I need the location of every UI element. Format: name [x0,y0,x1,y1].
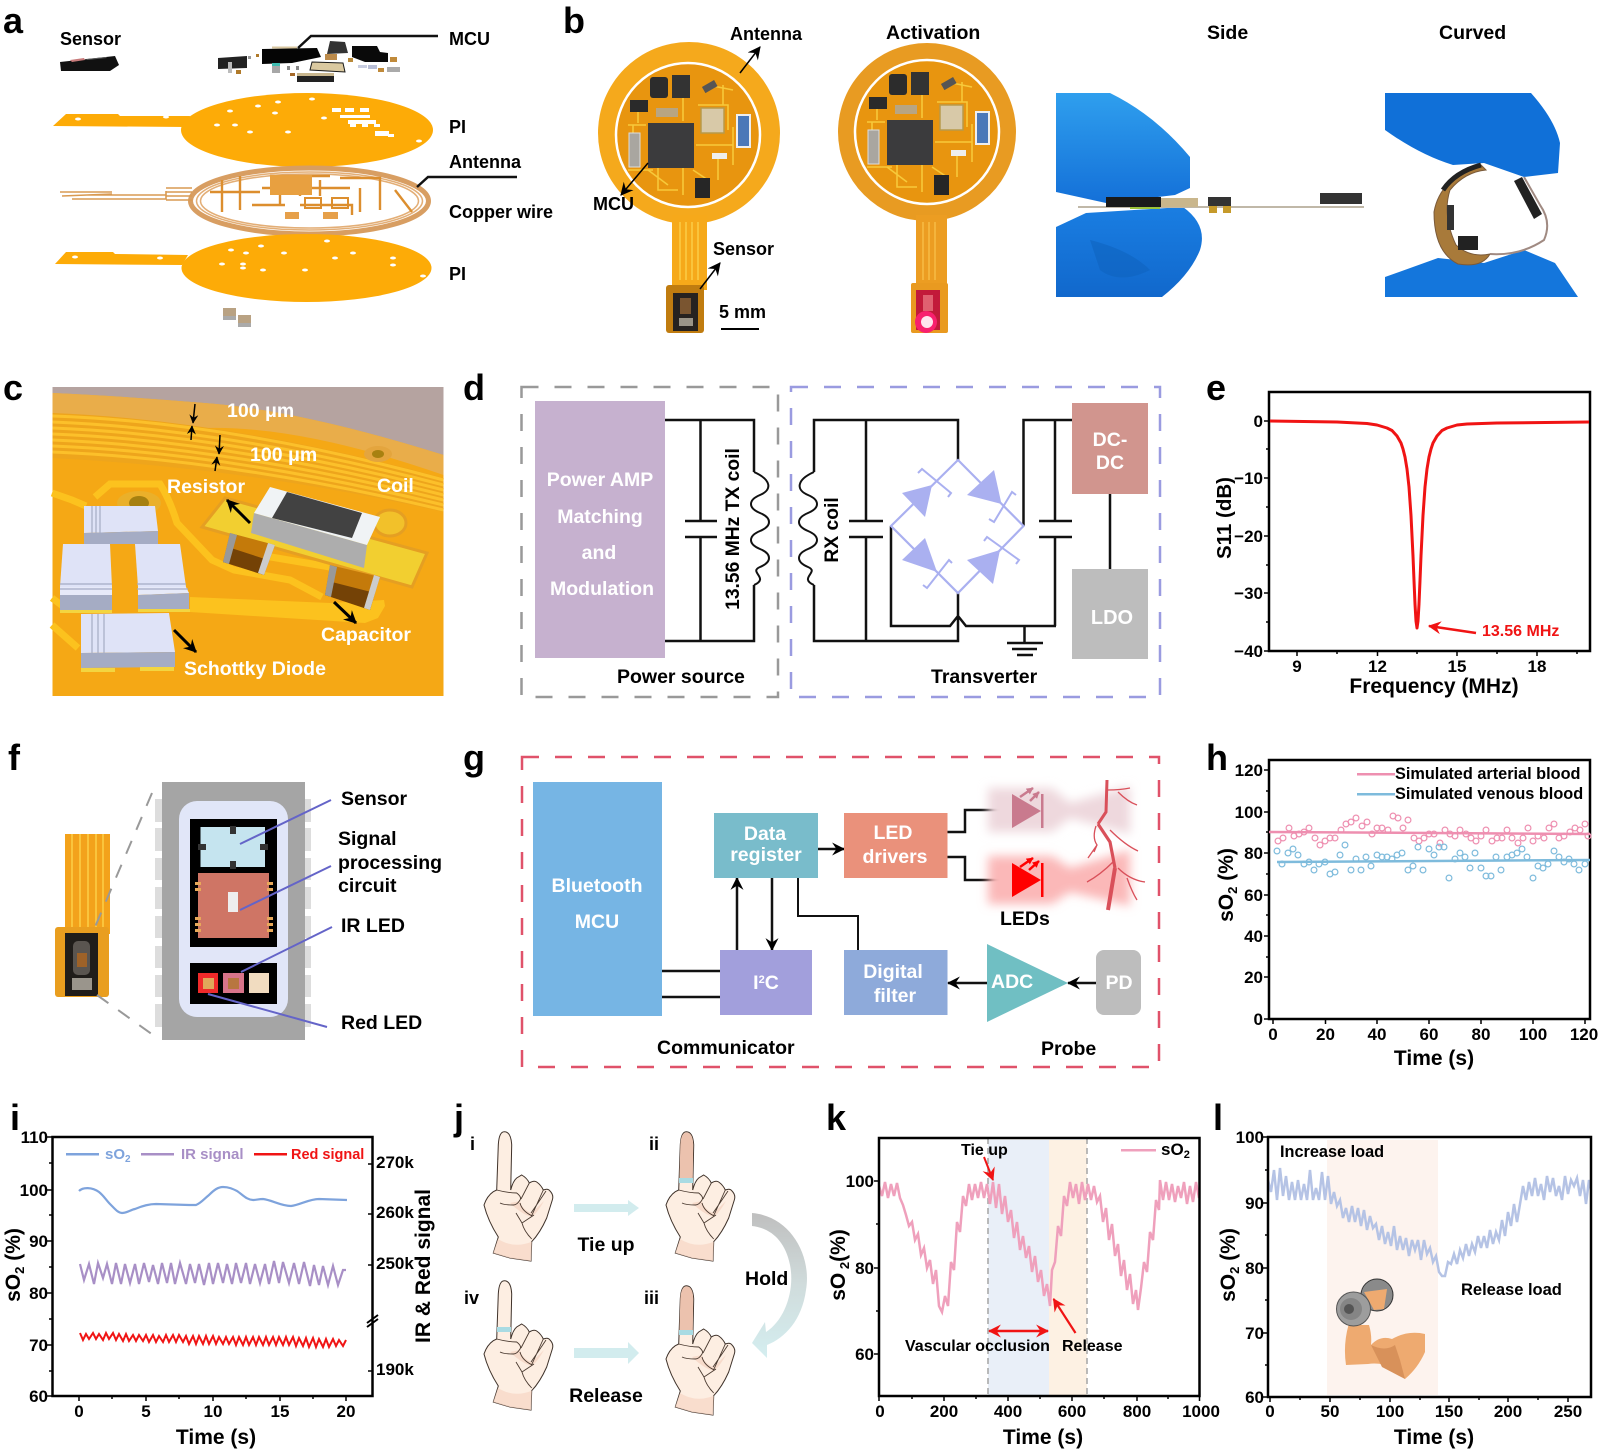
label: Resistor: Resistor [167,476,245,498]
panel a: exploded device layers [3,0,553,327]
IR signal line [80,1261,346,1286]
y tick labels: −10 [1234,469,1263,488]
step labels: iii [644,1288,659,1308]
diode bridge [891,460,1024,593]
panel letter j: j [453,1097,464,1138]
transverter dashed box [791,387,1160,697]
label: 100 μm: 100 μm [250,444,317,466]
x tick labels: 150 [1435,1402,1463,1421]
block: Digital filter: filter [874,985,917,1007]
label: PI: PI [449,264,466,284]
sensor package diagram [155,782,311,1040]
panel d: wireless power circuit [463,367,1160,697]
right y tick labels: 260k [376,1203,414,1222]
antenna and copper wire layer [60,168,428,234]
power AMP block: Matching [557,506,643,528]
hand i [484,1132,553,1261]
MCU leader line [298,36,438,48]
block: LED drivers: drivers [862,846,928,868]
LED glow [988,786,1130,906]
x tick labels: 600 [1058,1402,1086,1421]
panel letter d: d [463,367,485,408]
panel i: signal chart [2,1097,435,1449]
panel letter k: k [826,1097,847,1138]
label: Increase load: Increase load [1280,1143,1384,1161]
label: Antenna: Antenna [449,152,522,172]
panel h: sO2 scatter chart [1206,737,1598,1070]
block: Data register: register [730,844,802,866]
icon: blood vessel [1087,780,1145,910]
connecting wires [662,810,1096,997]
LDO block: LDO [1091,607,1133,629]
left y tick labels: 70 [29,1336,48,1355]
label: Transverter: Transverter [931,666,1038,688]
y tick labels: 100 [1235,803,1263,822]
dashed frame [522,757,1159,1067]
y tick labels: 60 [1244,886,1263,905]
right y tick labels: 250k [376,1254,414,1273]
photo: sensor flex [55,834,110,997]
left y tick labels: 90 [29,1232,48,1251]
power AMP block: Power AMP [547,469,653,491]
label: 13.56 MHz TX coil: 13.56 MHz TX coil [723,448,744,610]
panel letter e: e [1206,367,1226,408]
chart frame and ticks [47,1137,378,1401]
panel b: device photographs [563,0,1578,333]
legend: sO [1161,1140,1184,1159]
block: Digital filter: Digital [863,961,923,983]
x tick labels: 200 [930,1402,958,1421]
label: Release: Release [569,1385,643,1407]
label: Signal processing circuit: circuit [338,875,397,897]
x tick labels: 15 [271,1402,289,1421]
panel f: sensor package [8,737,442,1040]
left y tick labels: 80 [29,1284,48,1303]
chart frame and ticks [1263,1137,1591,1402]
bottom PI layer [55,234,432,302]
x tick labels: 80 [1472,1025,1490,1044]
panel k: occlusion sO2 chart [826,1097,1220,1449]
panel letter i: i [10,1097,20,1138]
chart frame and ticks [1264,392,1590,656]
legend: Simulated venous blood [1395,785,1583,803]
x tick labels [1265,1402,1582,1421]
y tick labels: 100 [1236,1128,1264,1147]
x tick labels: 10 [204,1402,222,1421]
x tick labels [1268,1025,1598,1044]
label: Communicator: Communicator [657,1037,795,1059]
y tick labels [1235,761,1263,1029]
label: Side: Side [1207,22,1248,44]
y tick labels: 100 [846,1172,874,1191]
block: I2C: I [753,972,759,994]
step labels [464,1134,659,1308]
arrows to components [174,500,356,652]
panel l: load sO2 chart [1213,1097,1591,1449]
y axis title: sO [827,1273,850,1301]
panel e: S11 chart [1206,367,1590,698]
y axis title: (%) [1215,848,1238,887]
RX circuit wires [799,420,1110,655]
legend: 2 [1184,1149,1190,1161]
label: Probe: Probe [1041,1038,1096,1060]
x tick labels: 100 [1376,1402,1404,1421]
annotation: 13.56 MHz [1429,623,1559,640]
arrow: antenna [740,47,760,73]
block: Bluetooth MCU: MCU [575,911,619,933]
sO2 line [79,1187,347,1213]
y tick labels: 0 [1254,412,1263,431]
panel letter f: f [8,737,21,778]
block: PD [1096,950,1141,1015]
label: Copper wire: Copper wire [449,202,553,222]
label: LEDs: LEDs [1000,908,1050,930]
panel letter c: c [3,367,23,408]
label: Schottky Diode: Schottky Diode [184,658,326,680]
label: Release: Release [1062,1338,1123,1355]
DC-DC block: DC [1096,452,1124,474]
label: Signal processing circuit: Signal [338,828,397,850]
panel letter h: h [1206,737,1228,778]
DC-DC block: DC- [1093,429,1127,451]
label: PI: PI [449,117,466,137]
label: Signal processing circuit: processing [338,852,442,874]
label: Sensor: Sensor [341,788,408,810]
x tick labels: 100 [1519,1025,1547,1044]
photo: side view [1056,93,1364,297]
y axis title: 2 [1225,887,1240,894]
panel c: circuit closeup render [3,367,444,696]
sO2 trace [879,1180,1199,1312]
power AMP block: and [582,542,616,564]
y axis title: 2 [837,1262,852,1273]
step labels: iv [464,1288,479,1308]
arrow: release [574,1342,639,1364]
y tick labels: 20 [1244,968,1263,987]
y tick labels: 60 [855,1345,874,1364]
power AMP block [535,401,665,658]
arrow: sensor [700,263,720,289]
label: Coil: Coil [377,475,414,497]
x tick labels: 1000 [1182,1402,1220,1421]
label: Tie up: Tie up [577,1234,635,1256]
x tick labels: 50 [1321,1402,1339,1421]
label: Signal processing circuit [338,828,442,897]
x tick labels: 0 [875,1402,885,1421]
x tick labels [875,1402,1220,1421]
block: ADC: ADC [991,971,1033,993]
block: Data register: Data [744,823,786,845]
release arrow [1054,1299,1076,1333]
x tick labels: 200 [1494,1402,1522,1421]
legend [1357,765,1583,803]
y tick labels [1236,1128,1264,1407]
label: IR LED: IR LED [341,915,405,937]
block: PD: PD [1105,972,1133,994]
occlusion span arrow [989,1330,1048,1332]
y tick labels: −30 [1234,584,1263,603]
resistor [251,487,380,568]
x axis title: Time (s) [176,1426,256,1449]
y tick labels: 80 [855,1259,874,1278]
label: Activation: Activation [886,22,980,44]
label: Antenna: Antenna [730,24,803,44]
hand iv [484,1281,553,1410]
capacitors [223,533,380,610]
x tick labels [74,1402,355,1421]
zoom guide lines [95,793,153,1035]
x tick labels: 15 [1448,657,1466,676]
x tick labels: 9 [1292,657,1302,676]
annotation: Tie up: Tie up [961,1142,1008,1159]
label: 100 μm: 100 μm [227,400,294,422]
label: Sensor: Sensor [713,239,774,259]
DC-DC block [1072,403,1148,494]
y tick labels: 70 [1245,1324,1264,1343]
arterial scatter [1278,816,1588,845]
power source dashed box [522,387,778,697]
chart frame and ticks [1264,760,1590,1024]
y tick labels: 40 [1244,927,1263,946]
legend: sO [105,1146,125,1163]
y tick labels: 0 [1254,1010,1263,1029]
panel j: finger occlusion steps [453,1097,807,1415]
venous reference line [1277,860,1590,862]
y tick labels: 120 [1235,761,1263,780]
label: MCU: MCU [593,194,634,214]
x tick labels: 5 [141,1402,151,1421]
left y tick labels: 110 [21,1128,48,1147]
x tick labels: 0 [1265,1402,1275,1421]
power AMP block: Modulation [550,578,654,600]
icon: sensor chip [60,56,119,71]
left y axis title: sO [2,1274,25,1302]
y axis title: S11 (dB) [1213,477,1236,559]
reference lines [1269,832,1590,834]
arrow: tie up [574,1200,639,1216]
x tick labels: 800 [1123,1402,1151,1421]
hand iii [666,1286,735,1415]
label: Red LED: Red LED [341,1012,422,1034]
label: Hold: Hold [745,1268,788,1290]
label: MCU: MCU [449,29,490,49]
x tick labels: 0 [1268,1025,1278,1044]
left y tick labels: 60 [29,1387,48,1406]
x axis title: Time (s) [1003,1426,1083,1449]
right y tick labels: 270k [376,1153,414,1172]
step labels: i [470,1134,475,1154]
block: LED drivers [844,813,948,878]
top PI layer [53,93,433,167]
render background [52,387,444,696]
x tick labels: 18 [1528,657,1546,676]
block: Data register [714,813,818,878]
TX circuit wires, capacitor and coil [665,420,769,641]
x tick labels: 20 [1316,1025,1335,1044]
y tick labels: 80 [1245,1259,1264,1278]
venous scatter [1277,845,1585,878]
label: Release load: Release load [1461,1281,1562,1299]
S11 curve [1270,421,1589,628]
x tick labels: 250 [1554,1402,1582,1421]
x tick labels: 12 [1368,657,1387,676]
y axis title: 2 [1227,1267,1242,1274]
left y axis title: 2 [12,1267,27,1274]
right y tick labels [376,1153,414,1379]
x tick labels: 0 [74,1402,84,1421]
y axis title: sO [1215,894,1238,922]
y tick labels [1234,412,1263,661]
y axis title: sO [1217,1274,1240,1302]
legend [1121,1140,1190,1161]
annotation: Tie up [961,1142,1008,1180]
x axis title: Time (s) [1394,1426,1474,1449]
chart frame and ticks [874,1138,1200,1401]
hand ii [666,1132,735,1261]
block: Bluetooth MCU [533,782,662,1016]
block: Bluetooth MCU: Bluetooth [552,875,642,897]
y tick labels: 60 [1245,1388,1264,1407]
label: Curved: Curved [1439,22,1506,44]
photo: activated device [838,43,1016,333]
icon: arm lifting dumbbell [1336,1279,1425,1379]
step labels: ii [649,1134,659,1154]
legend: 2 [125,1154,131,1165]
panel letter a: a [3,0,24,41]
photo: curved view [1385,93,1578,297]
shaded load phase [1327,1140,1438,1395]
antenna leader line [417,177,517,187]
x axis title: Time (s) [1394,1047,1474,1070]
photo: device front [598,42,780,333]
right y tick labels: 190k [376,1360,414,1379]
arrow: hold [752,1213,807,1358]
y tick labels: −20 [1234,527,1263,546]
block: Digital filter [844,950,948,1015]
label: Sensor: Sensor [60,29,121,49]
annotation: 13.56 MHz: 13.56 MHz [1482,623,1559,640]
block: LED drivers: LED [874,822,912,844]
scale bar: 5 mm [719,302,766,322]
panel letter g: g [463,737,485,778]
x tick labels: 400 [994,1402,1022,1421]
block: I2C [720,950,812,1015]
y tick labels: 90 [1245,1194,1264,1213]
MCU and component cluster [218,41,400,82]
panel letter b: b [563,0,585,41]
sO2 trace [1268,1168,1591,1276]
dimension arrows [191,404,220,471]
x tick labels: 40 [1368,1025,1386,1044]
y axis title: (%) [827,1229,850,1262]
Schottky diodes [60,506,190,672]
LDO block [1072,569,1148,659]
x tick labels: 120 [1570,1025,1598,1044]
pointer lines [208,800,332,1027]
label: Vascular occlusion: Vascular occlusion [905,1338,1050,1355]
label: Power source: Power source [617,666,745,688]
shaded phases [988,1138,1087,1396]
legend: Red signal [291,1147,364,1163]
block: I2C: C [765,972,779,994]
left y axis title: (%) [2,1228,25,1267]
block: ADC [987,944,1068,1022]
y tick labels [846,1172,874,1364]
y tick labels: −40 [1234,642,1263,661]
arrow: MCU [621,163,648,195]
left y tick labels [20,1128,48,1406]
left y tick labels: 100 [20,1181,48,1200]
x tick labels: 60 [1420,1025,1438,1044]
y axis title: (%) [1217,1228,1240,1267]
block: I2C: 2 [759,974,765,986]
legend: Simulated arterial blood [1395,765,1580,783]
label: Capacitor: Capacitor [321,624,411,646]
right y axis title: IR & Red signal [412,1189,435,1343]
small LED parts [223,308,251,327]
panel g: system block diagram [463,737,1159,1067]
panel letter l: l [1213,1097,1223,1138]
x axis title: Frequency (MHz) [1349,675,1519,698]
legend: IR signal [181,1146,244,1163]
red signal line [80,1333,346,1347]
label: RX coil: RX coil [822,497,843,563]
LED symbols [1012,788,1044,897]
x tick labels [1292,657,1546,676]
y tick labels: 80 [1244,844,1263,863]
legend [66,1146,364,1165]
x tick labels: 20 [337,1402,355,1421]
